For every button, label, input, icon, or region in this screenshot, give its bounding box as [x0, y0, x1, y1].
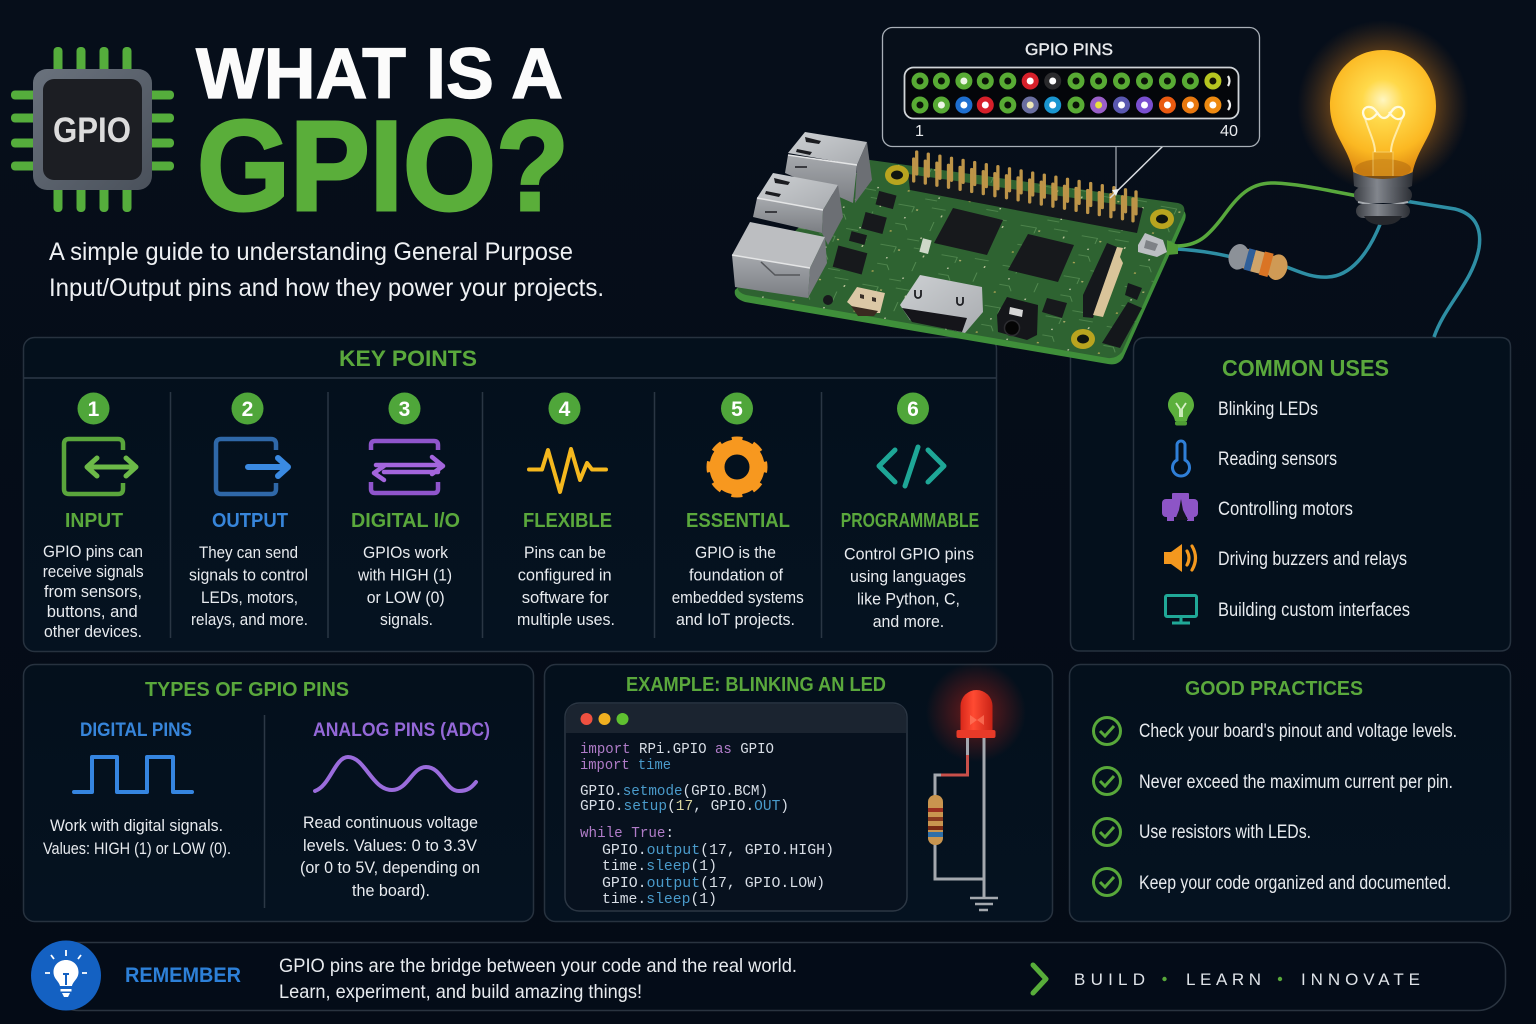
resistor on wire	[1226, 242, 1290, 282]
item 6: programmable: 6	[907, 398, 919, 421]
code lines: GPIO.setmode(GPIO.BCM)	[580, 784, 768, 800]
green wire	[1176, 183, 1358, 246]
item 5: essential: embedded systems	[672, 588, 804, 607]
item 2: output: LEDs, motors,	[201, 588, 298, 607]
callout title: GPIO PINS	[1025, 40, 1113, 59]
item 1: input: GPIO pins can	[43, 542, 143, 561]
item 3: digital i/o: GPIOs work	[363, 543, 448, 562]
code lines: import RPi.GPIO as GPIO	[580, 742, 774, 758]
subtitle: Input/Output pins and how they power your projects.	[49, 274, 604, 302]
usb port upper	[785, 132, 872, 203]
item 3: digital i/o: or LOW (0)	[367, 588, 445, 607]
item 2: output: They can send	[199, 543, 298, 562]
item 5: essential: foundation of	[689, 566, 783, 584]
tagline	[1074, 970, 1420, 989]
blue wires	[1176, 201, 1480, 337]
item 5: essential: 5	[731, 398, 743, 421]
item 3: digital i/o: signals.	[380, 610, 433, 629]
analog pins: (or 0 to 5V, depending on	[300, 858, 480, 877]
item 5: essential	[672, 392, 804, 629]
practice 2: Never exceed the maximum current per pin.	[1139, 772, 1453, 793]
code lines: while True:	[580, 826, 674, 842]
analog pins	[300, 720, 490, 900]
item 2: output: 2	[242, 398, 253, 421]
GPIO chip icon: GPIO	[53, 111, 131, 150]
heading: types: TYPES OF GPIO PINS	[145, 679, 349, 701]
use: driving buzzers: Driving buzzers and relays	[1218, 549, 1407, 570]
tagline: INNOVATE	[1301, 970, 1420, 989]
header connector	[908, 152, 1143, 233]
analog pins: ANALOG PINS (ADC)	[313, 720, 490, 741]
item 4: flexible: software for	[522, 588, 609, 607]
item 1: input: buttons, and	[47, 602, 138, 621]
title: GPIO?	[197, 95, 569, 238]
item 6: programmable: and more.	[873, 612, 944, 631]
subtitle: A simple guide to understanding General Purpose	[49, 238, 573, 266]
GPIO chip icon	[11, 47, 174, 212]
item 4: flexible	[517, 392, 615, 629]
item 1: input: INPUT	[65, 510, 123, 532]
practice 4	[1094, 868, 1451, 896]
code lines: import time	[580, 758, 671, 774]
item 3: digital i/o: with HIGH (1)	[357, 566, 452, 584]
hdmi port	[900, 275, 983, 333]
ribbon connector	[1083, 243, 1123, 318]
digital pins: DIGITAL PINS	[80, 720, 192, 741]
remember label: REMEMBER	[125, 964, 241, 987]
item 1: input: other devices.	[44, 622, 142, 641]
item 6: programmable: using languages	[850, 567, 966, 586]
item 2: output: OUTPUT	[212, 510, 288, 532]
digital pins	[43, 720, 231, 858]
title: WHAT IS A	[196, 35, 563, 114]
panel: types of gpio pins	[24, 664, 534, 922]
ethernet port	[732, 222, 827, 298]
panel: example blinking an led	[544, 662, 1052, 922]
item 5: essential: GPIO is the	[695, 543, 776, 562]
item 2: output: signals to control	[189, 566, 308, 584]
code editor	[565, 703, 907, 911]
heading: key points: KEY POINTS	[339, 346, 477, 371]
pin numbers	[915, 123, 1238, 140]
remember text: Learn, experiment, and build amazing things!	[279, 981, 642, 1003]
usb port lower	[753, 173, 843, 245]
pin strip	[904, 68, 1238, 118]
heading: common uses: COMMON USES	[1222, 355, 1389, 381]
use: reading sensors: Reading sensors	[1218, 449, 1337, 470]
item 2: output: relays, and more.	[191, 610, 308, 629]
use: blinking leds	[1168, 392, 1318, 426]
practice 2	[1094, 768, 1453, 794]
panel: common uses	[1070, 338, 1510, 651]
digital pins: Values: HIGH (1) or LOW (0).	[43, 839, 231, 858]
icon: idea bulb	[31, 940, 101, 1010]
use: custom interfaces: Building custom interfaces	[1218, 600, 1410, 621]
item 3: digital i/o: DIGITAL I/O	[351, 510, 460, 532]
pin numbers: 1	[915, 123, 924, 140]
arrow chevron	[1033, 965, 1046, 993]
item 4: flexible: Pins can be	[524, 543, 606, 562]
micro hdmi power	[847, 287, 885, 316]
code lines: time.sleep(1)	[602, 892, 717, 908]
led circuit	[926, 662, 1026, 910]
audio jack	[997, 297, 1038, 340]
item 4: flexible: multiple uses.	[517, 610, 615, 629]
item 6: programmable: Control GPIO pins	[844, 544, 974, 564]
use: custom interfaces	[1166, 596, 1410, 623]
analog pins: the board).	[352, 881, 430, 900]
pin numbers: 40	[1220, 123, 1238, 140]
digital pins: Work with digital signals.	[50, 816, 223, 835]
item 6: programmable: PROGRAMMABLE	[841, 510, 979, 532]
analog pins: Read continuous voltage	[303, 813, 478, 832]
practice 3	[1094, 818, 1311, 846]
subtitle	[49, 238, 604, 302]
remember text: GPIO pins are the bridge between your code and the real world.	[279, 955, 797, 977]
tagline: LEARN	[1186, 970, 1261, 989]
light bulb	[1330, 50, 1436, 225]
item 1: input	[43, 392, 144, 641]
code lines: GPIO.output(17, GPIO.LOW)	[602, 876, 825, 892]
item 2: output	[189, 392, 308, 629]
use: reading sensors	[1172, 441, 1337, 476]
remember text	[279, 955, 797, 1003]
panel: key points	[24, 338, 996, 652]
item 3: digital i/o	[351, 392, 460, 629]
sd slot	[1102, 283, 1142, 348]
item 5: essential: ESSENTIAL	[686, 510, 790, 532]
bulb glow	[1297, 20, 1469, 192]
practice 4: Keep your code organized and documented.	[1139, 873, 1451, 894]
wire connector	[1138, 233, 1178, 257]
main chips	[823, 191, 1074, 318]
panel: good practices	[1070, 664, 1510, 922]
item 3: digital i/o: 3	[399, 398, 410, 421]
code lines: GPIO.setup(17, GPIO.OUT)	[580, 799, 789, 815]
tagline: BUILD	[1074, 970, 1145, 989]
mounting holes	[885, 165, 1174, 349]
analog pins: levels. Values: 0 to 3.3V	[303, 836, 478, 855]
heading: good practices: GOOD PRACTICES	[1185, 678, 1363, 700]
use: driving buzzers	[1164, 544, 1407, 572]
item 1: input: from sensors,	[44, 582, 142, 601]
white smd parts	[919, 238, 932, 254]
item 6: programmable	[841, 392, 979, 631]
use: blinking leds: Blinking LEDs	[1218, 399, 1318, 420]
item 4: flexible: 4	[559, 398, 571, 421]
item 4: flexible: FLEXIBLE	[523, 510, 612, 532]
callout: gpio pins	[882, 28, 1260, 198]
panel: remember bar	[31, 940, 1506, 1010]
code lines: GPIO.output(17, GPIO.HIGH)	[602, 843, 834, 859]
practice 1: Check your board's pinout and voltage levels.	[1139, 721, 1457, 742]
item 4: flexible: configured in	[518, 566, 612, 584]
item 1: input: receive signals	[43, 562, 144, 581]
use: controlling motors: Controlling motors	[1218, 499, 1353, 520]
use: controlling motors	[1162, 493, 1353, 521]
practice 3: Use resistors with LEDs.	[1139, 822, 1311, 843]
practice 1	[1094, 718, 1457, 744]
title	[196, 35, 569, 238]
item 6: programmable: like Python, C,	[857, 590, 960, 608]
heading: example: EXAMPLE: BLINKING AN LED	[626, 674, 886, 696]
code lines	[580, 742, 834, 908]
item 1: input: 1	[88, 398, 100, 421]
raspberry pi board	[732, 132, 1186, 364]
code lines: time.sleep(1)	[602, 859, 717, 875]
item 5: essential: and IoT projects.	[676, 610, 795, 629]
